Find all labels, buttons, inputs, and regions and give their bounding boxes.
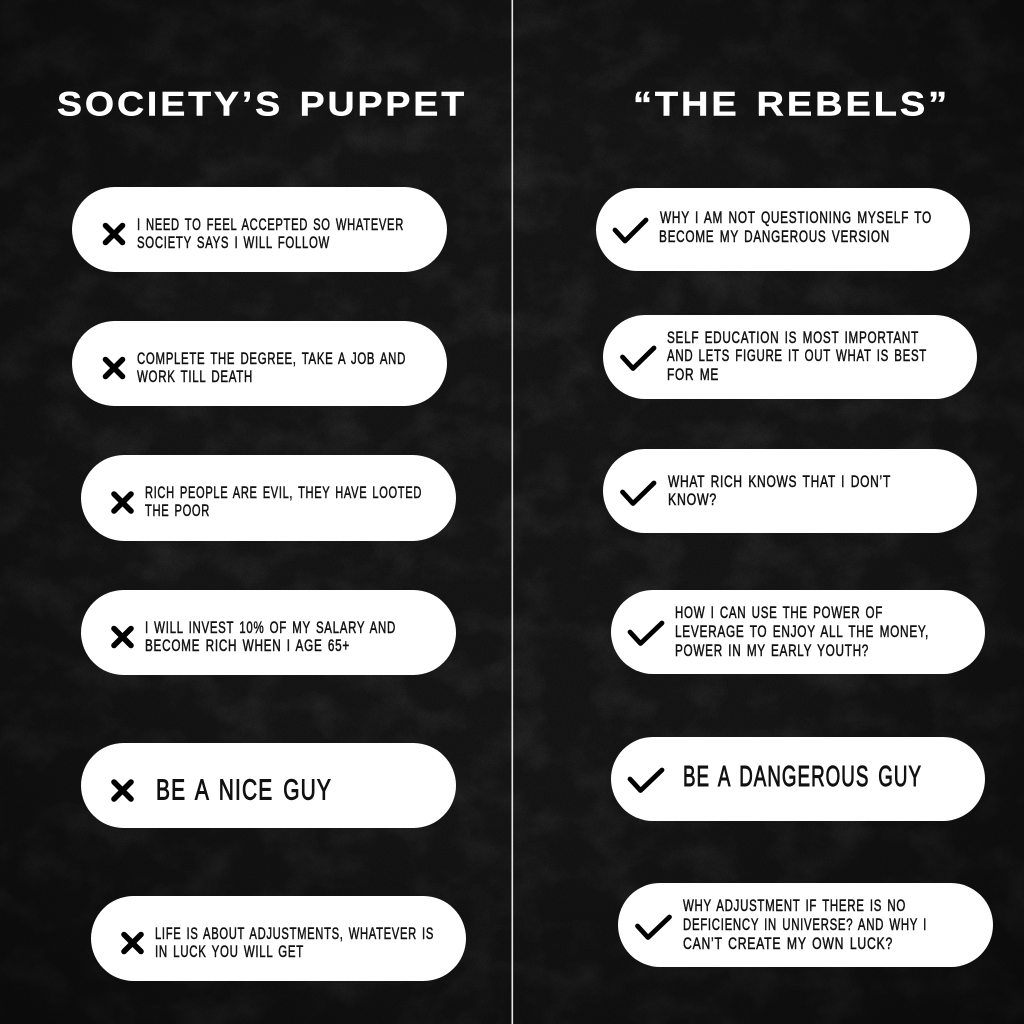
- item: why adjustment: CAN’T CREATE MY OWN LUCK?: [683, 935, 893, 953]
- item: invest 10 percent: I WILL INVEST 10% OF MY SALARY AND: [145, 619, 396, 637]
- item: power of leverage: [611, 590, 985, 674]
- item: rich people are evil: THE POOR: [145, 502, 210, 520]
- item: be a dangerous guy: [611, 737, 985, 821]
- item: what rich knows: [603, 449, 977, 533]
- item: what rich knows: WHAT RICH KNOWS THAT I DON’T: [668, 473, 891, 491]
- item: degree and job: [72, 321, 447, 406]
- item: power of leverage: HOW I CAN USE THE POWER OF: [675, 604, 883, 622]
- item: life is about adjustments: LIFE IS ABOUT ADJUSTMENTS, WHATEVER IS: [155, 925, 434, 943]
- item: rich people are evil: [81, 455, 456, 541]
- item: accepted by society: [72, 187, 447, 272]
- item: why adjustment: [618, 883, 993, 967]
- item: rich people are evil: RICH PEOPLE ARE EVIL, THEY HAVE LOOTED: [145, 484, 422, 502]
- panel: society's puppet: [57, 86, 467, 981]
- item: self education: [603, 315, 977, 399]
- item: self education: SELF EDUCATION IS MOST IMPORTANT: [667, 329, 919, 347]
- item: life is about adjustments: IN LUCK YOU WILL GET: [155, 943, 304, 961]
- item: accepted by society: I NEED TO FEEL ACCEPTED SO WHATEVER: [137, 216, 404, 234]
- panel: the rebels: [596, 86, 993, 967]
- item: degree and job: WORK TILL DEATH: [137, 368, 253, 386]
- item: self education: FOR ME: [667, 366, 719, 384]
- item: invest 10 percent: BECOME RICH WHEN I AGE 65+: [145, 637, 350, 655]
- item: why adjustment: WHY ADJUSTMENT IF THERE IS NO: [683, 897, 906, 915]
- item: questioning myself: BECOME MY DANGEROUS VERSION: [659, 228, 890, 246]
- heading: the rebels: “THE REBELS”: [633, 86, 950, 124]
- item: life is about adjustments: [91, 896, 466, 981]
- item: be a nice guy: BE A NICE GUY: [156, 774, 332, 806]
- item: invest 10 percent: [81, 590, 456, 675]
- item: be a nice guy: [81, 743, 456, 828]
- item: what rich knows: KNOW?: [668, 491, 717, 509]
- item: accepted by society: SOCIETY SAYS I WILL FOLLOW: [137, 234, 330, 252]
- item: power of leverage: LEVERAGE TO ENJOY ALL THE MONEY,: [675, 623, 929, 641]
- heading: society's puppet: SOCIETY’S PUPPET: [57, 86, 467, 124]
- item: questioning myself: [596, 188, 970, 271]
- item: degree and job: COMPLETE THE DEGREE, TAKE A JOB AND: [137, 350, 406, 368]
- item: power of leverage: POWER IN MY EARLY YOUTH?: [675, 642, 869, 660]
